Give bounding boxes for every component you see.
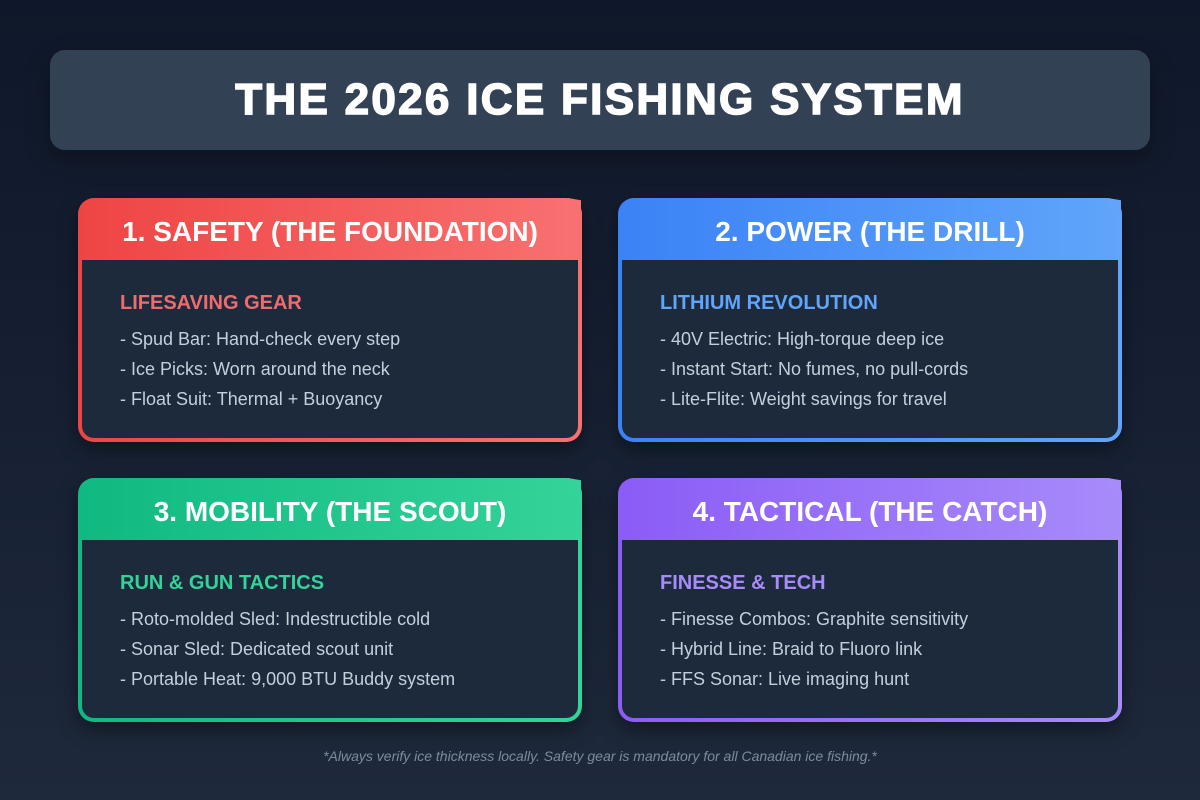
subheading: lithium revolution: LITHIUM REVOLUTION xyxy=(660,292,878,314)
item: ice picks: - Ice Picks: Worn around the neck xyxy=(120,359,390,379)
panel: safety xyxy=(78,198,582,442)
item: instant start: - Instant Start: No fumes, no pull-cords xyxy=(660,359,968,379)
subheading: finesse and tech: FINESSE & TECH xyxy=(660,572,826,594)
title: THE 2026 ICE FISHING SYSTEM xyxy=(235,75,965,124)
panel: tactical xyxy=(618,478,1122,722)
panel body: safety xyxy=(82,260,578,438)
item: ffs sonar: - FFS Sonar: Live imaging hunt xyxy=(660,669,909,689)
panel: power xyxy=(618,198,1122,442)
item: sled: - Roto-molded Sled: Indestructible cold xyxy=(120,609,430,629)
panel: mobility xyxy=(78,478,582,722)
item: float suit: - Float Suit: Thermal + Buoyancy xyxy=(120,389,382,409)
panel body: tactical xyxy=(622,540,1118,718)
panel body: power xyxy=(622,260,1118,438)
heading: mobility: 3. MOBILITY (THE SCOUT) xyxy=(154,496,506,527)
title banner xyxy=(50,50,1150,150)
item: 40V electric: - 40V Electric: High-torque deep ice xyxy=(660,329,944,349)
item: spud bar: - Spud Bar: Hand-check every step xyxy=(120,329,400,349)
subheading: lifesaving gear: LIFESAVING GEAR xyxy=(120,292,302,314)
item: combos: - Finesse Combos: Graphite sensitivity xyxy=(660,609,968,629)
item: sonar sled: - Sonar Sled: Dedicated scout unit xyxy=(120,639,393,659)
heading: safety: 1. SAFETY (THE FOUNDATION) xyxy=(122,216,538,247)
subheading: run and gun: RUN & GUN TACTICS xyxy=(120,572,324,594)
panel body: mobility xyxy=(82,540,578,718)
footnote: *Always verify ice thickness locally. Safety gear is mandatory for all Canadian ice fishing.* xyxy=(323,748,877,764)
heading: tactical: 4. TACTICAL (THE CATCH) xyxy=(693,496,1047,527)
item: portable heat: - Portable Heat: 9,000 BTU Buddy system xyxy=(120,669,455,689)
item: lite-flite: - Lite-Flite: Weight savings for travel xyxy=(660,389,947,409)
heading: power: 2. POWER (THE DRILL) xyxy=(715,216,1025,247)
item: hybrid line: - Hybrid Line: Braid to Fluoro link xyxy=(660,639,922,659)
